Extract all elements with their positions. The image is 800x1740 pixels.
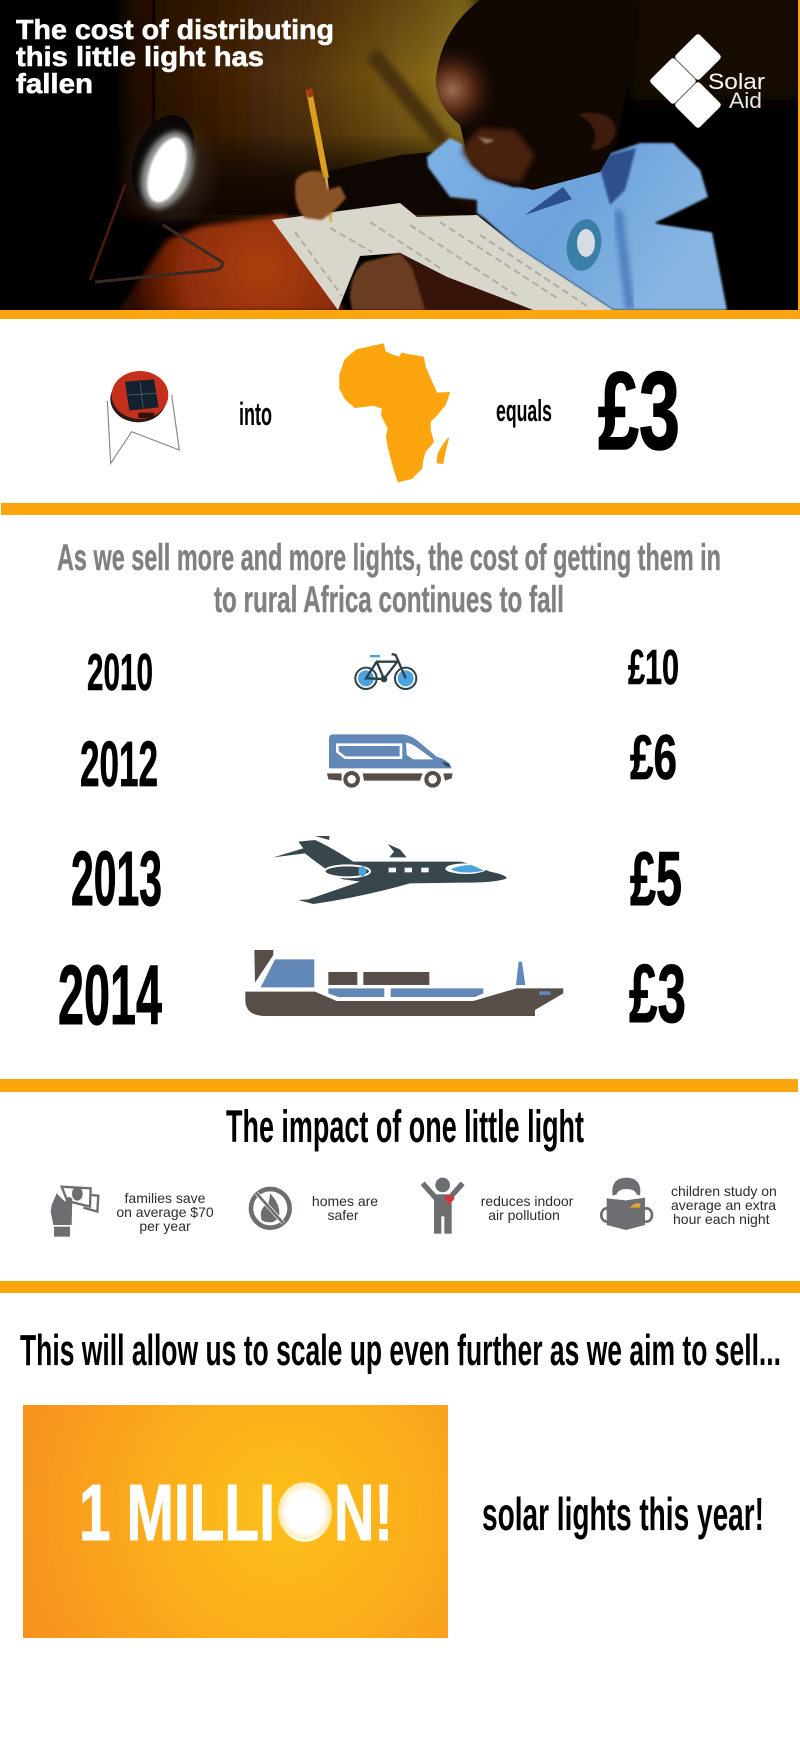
icon: glowing sun bbox=[278, 1482, 332, 1542]
panel: header photo bbox=[0, 0, 800, 310]
text: equals: equals bbox=[496, 393, 552, 428]
photo: pencil bbox=[309, 89, 331, 222]
icon: plane bbox=[273, 836, 507, 904]
row: 2010 bicycle: 2010 bbox=[87, 644, 153, 702]
text: children study: hour each night bbox=[673, 1211, 770, 1227]
photo: arm bbox=[325, 152, 482, 218]
icon: van bbox=[327, 734, 453, 786]
row: 2012 van: £6 bbox=[630, 723, 677, 793]
photo: solar lamp bbox=[90, 106, 222, 282]
row: 2013 plane: 2013 bbox=[71, 836, 162, 922]
heading: falling cost: to rural Africa continues to fall bbox=[214, 579, 564, 620]
photo: notebook bbox=[272, 203, 613, 310]
row: 2010 bicycle: £10 bbox=[628, 641, 679, 695]
logo: SolarAid: Solar bbox=[708, 69, 765, 94]
panel: impact of one little light bbox=[51, 1101, 777, 1237]
photo: table bbox=[117, 215, 345, 312]
icon: money in hand bbox=[51, 1187, 98, 1237]
row: 2014 ship: 2014 bbox=[58, 948, 162, 1042]
panel: cost timeline bbox=[58, 641, 686, 1042]
text: children study: average an extra bbox=[671, 1197, 776, 1213]
photo: writing hand bbox=[295, 171, 346, 220]
header title bbox=[16, 14, 334, 99]
header title: fallen bbox=[16, 68, 93, 99]
text: families save bbox=[116, 1190, 214, 1234]
text: 1 million: 1 MILLI bbox=[79, 1468, 275, 1557]
text: homes are safer bbox=[312, 1193, 378, 1223]
header title: The cost of distributing bbox=[16, 14, 334, 45]
icon: cargo ship bbox=[245, 950, 563, 1016]
row: 2012 van bbox=[80, 723, 677, 800]
icon: bicycle bbox=[355, 654, 416, 689]
text: children study: children study on bbox=[671, 1183, 777, 1199]
row: 2010 bicycle bbox=[87, 641, 679, 702]
icon: solar light bbox=[107, 371, 179, 463]
text: homes are safer: safer bbox=[327, 1207, 359, 1223]
photo: wall bbox=[118, 0, 798, 223]
text: families save: on average $70 bbox=[116, 1204, 214, 1220]
photo: boy head bbox=[436, 0, 639, 190]
text: 1 million: O bbox=[280, 1468, 330, 1557]
text: into: into bbox=[239, 396, 272, 432]
text: families save: per year bbox=[139, 1218, 191, 1234]
text: children study bbox=[671, 1183, 777, 1227]
text: reduces indoor air pollution bbox=[481, 1193, 574, 1223]
icon: child reading bbox=[601, 1178, 652, 1230]
logo: SolarAid: Aid bbox=[729, 88, 762, 113]
photo: lower hand bbox=[350, 253, 533, 310]
row: 2013 plane: £5 bbox=[630, 837, 682, 922]
text: families save: families save bbox=[125, 1190, 206, 1206]
text: 1 million: N! bbox=[334, 1468, 393, 1557]
photo: shirt bbox=[427, 138, 727, 310]
row: 2014 ship bbox=[58, 947, 686, 1042]
icon: map of Africa bbox=[340, 344, 449, 482]
panel: 1 million graphic bbox=[23, 1405, 448, 1638]
row: 2012 van: 2012 bbox=[80, 728, 158, 800]
icon: person with heart bbox=[423, 1178, 463, 1234]
panel: one light to Africa equals £3 bbox=[107, 344, 680, 482]
text: reduces indoor air pollution: air pollution bbox=[488, 1207, 560, 1223]
text: reduces indoor air pollution: reduces indoor bbox=[481, 1193, 574, 1209]
row: 2013 plane bbox=[71, 836, 682, 922]
text: homes are safer: homes are bbox=[312, 1193, 378, 1209]
row: 2014 ship: £3 bbox=[629, 947, 686, 1040]
header title: this little light has bbox=[16, 41, 264, 72]
icon: no fire bbox=[251, 1189, 290, 1228]
logo: SolarAid bbox=[649, 33, 765, 129]
heading: falling cost bbox=[57, 537, 721, 620]
text: £3 price: £3 bbox=[598, 350, 680, 473]
